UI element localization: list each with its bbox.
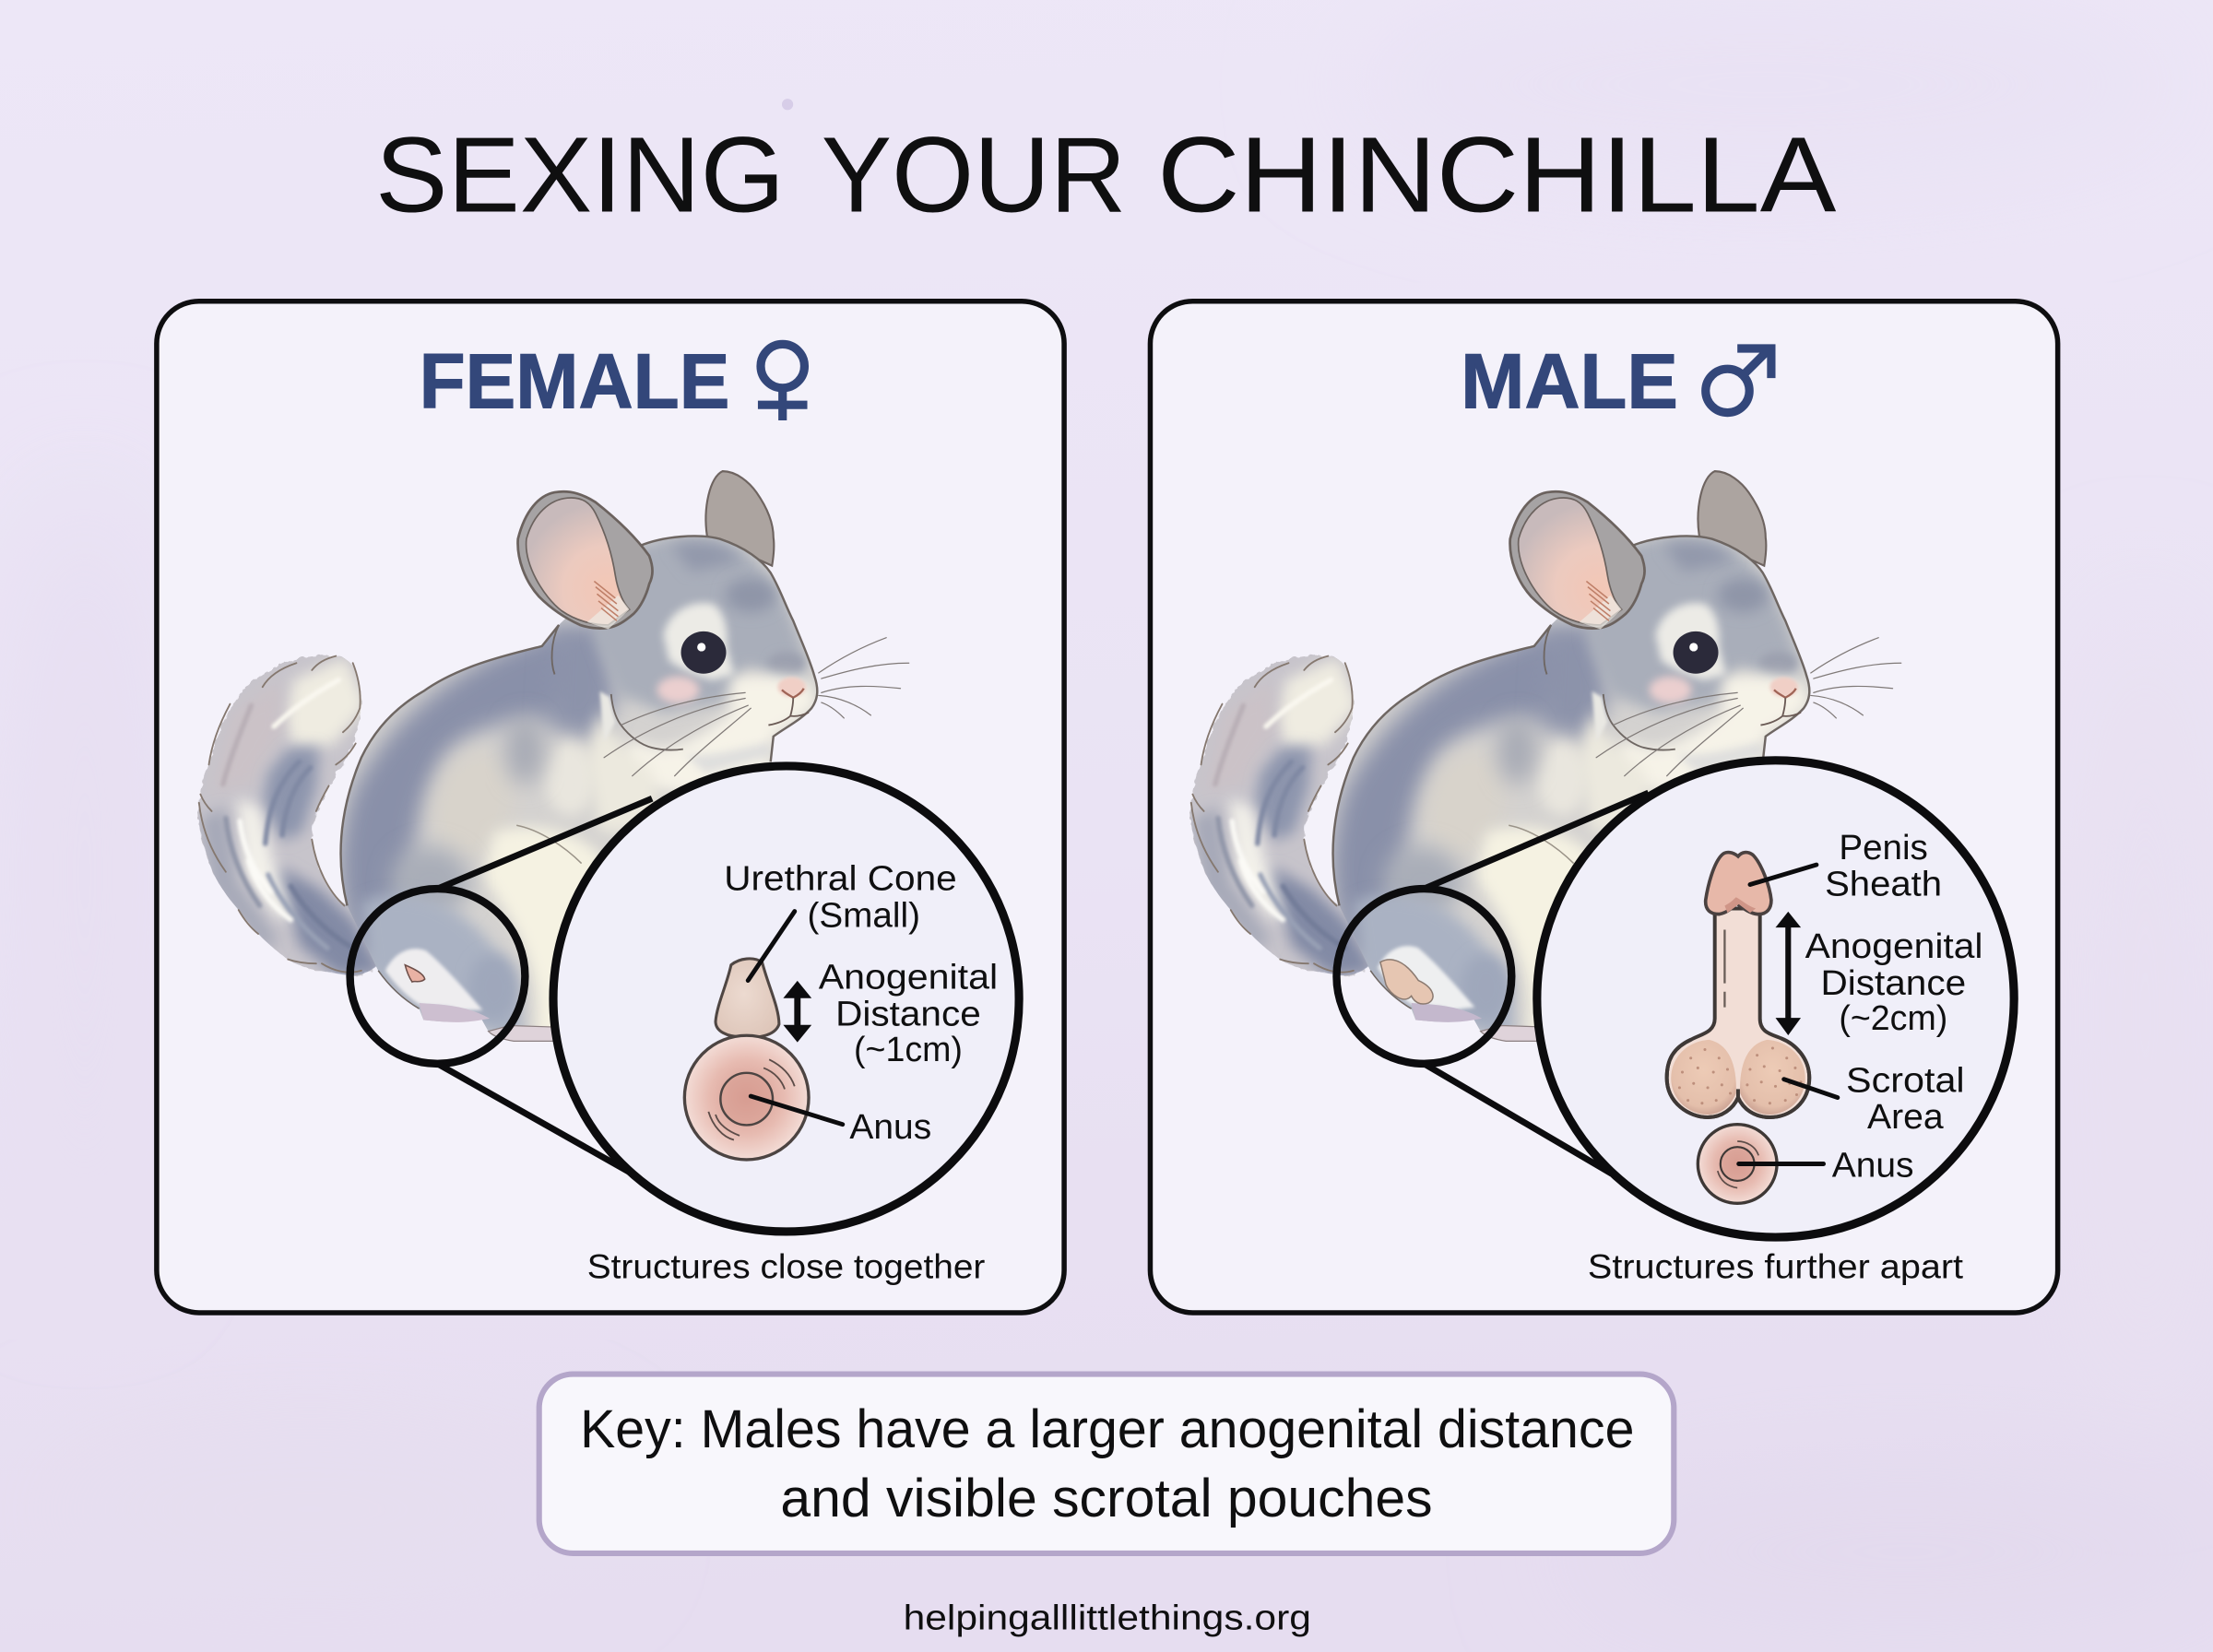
magnifier connector lines [437, 798, 652, 1174]
title: YOUR [822, 115, 1126, 235]
label: penis sheath: Penis [1839, 828, 1928, 867]
glans [1706, 853, 1771, 914]
label: anogenital distance: Distance [835, 995, 981, 1034]
label: anogenital distance: Anogenital [1805, 926, 1983, 966]
magnifier lens [553, 766, 1019, 1232]
magnifier connector lines [1424, 793, 1649, 1174]
genital detail on chinchilla [385, 949, 490, 1022]
icon: female symbol [758, 344, 808, 420]
label: scrotal area: Area [1867, 1097, 1944, 1137]
label: anus: Anus [849, 1107, 931, 1147]
footer website: helpingalllittlethings.org [904, 1599, 1311, 1638]
label: scrotal area: Scrotal [1846, 1060, 1965, 1100]
title [375, 115, 1837, 235]
urethral cone [716, 959, 779, 1037]
female panel card [157, 301, 1064, 1313]
panel: female [157, 301, 1064, 1313]
distance arrow [1777, 913, 1800, 1034]
label: urethral cone [724, 859, 957, 935]
label: anogenital distance [1805, 926, 1983, 1038]
label: penis sheath: Sheath [1825, 865, 1942, 904]
caption: male: Structures further apart [1588, 1247, 1963, 1285]
label: anogenital distance: (~1cm) [854, 1030, 963, 1069]
title: CHINCHILLA [1157, 115, 1837, 235]
label: scrotal area [1846, 1060, 1965, 1137]
key callout [539, 1375, 1674, 1553]
leader lines [748, 912, 843, 1125]
key callout: and visible scrotal pouches [780, 1469, 1433, 1528]
label: penis sheath [1825, 828, 1942, 904]
key callout: Key: Males have a larger anogenital distance [580, 1399, 1634, 1459]
icon: male symbol [1706, 348, 1771, 413]
scrotal lobes [1667, 1038, 1809, 1117]
anus diagram [684, 1035, 809, 1160]
distance arrow [785, 982, 811, 1041]
penis and scrotal diagram [1667, 853, 1809, 1117]
label: anogenital distance: Anogenital [819, 958, 998, 997]
leader lines [1739, 865, 1838, 1164]
caption: female: Structures close together [587, 1247, 985, 1285]
label: anogenital distance [819, 958, 998, 1069]
label: anogenital distance: Distance [1820, 963, 1966, 1003]
magnifier source circle [350, 889, 525, 1064]
heading: male: MALE [1461, 337, 1678, 424]
anus diagram [1698, 1125, 1777, 1203]
panel: male [1150, 301, 2058, 1313]
label: urethral cone: (Small) [808, 895, 920, 935]
label: anogenital distance: (~2cm) [1839, 998, 1947, 1038]
magnifier source circle [1336, 889, 1511, 1064]
label: urethral cone: Urethral Cone [724, 859, 957, 899]
magnifier lens [1537, 761, 2014, 1237]
chinchilla illustration: female [198, 471, 909, 1044]
heading: female: FEMALE [420, 337, 729, 424]
label: anus: Anus [1832, 1145, 1914, 1185]
male panel card [1150, 301, 2058, 1313]
genital detail on chinchilla [1378, 946, 1482, 1022]
chinchilla illustration: male [1190, 471, 1901, 1044]
title: SEXING [375, 115, 785, 235]
